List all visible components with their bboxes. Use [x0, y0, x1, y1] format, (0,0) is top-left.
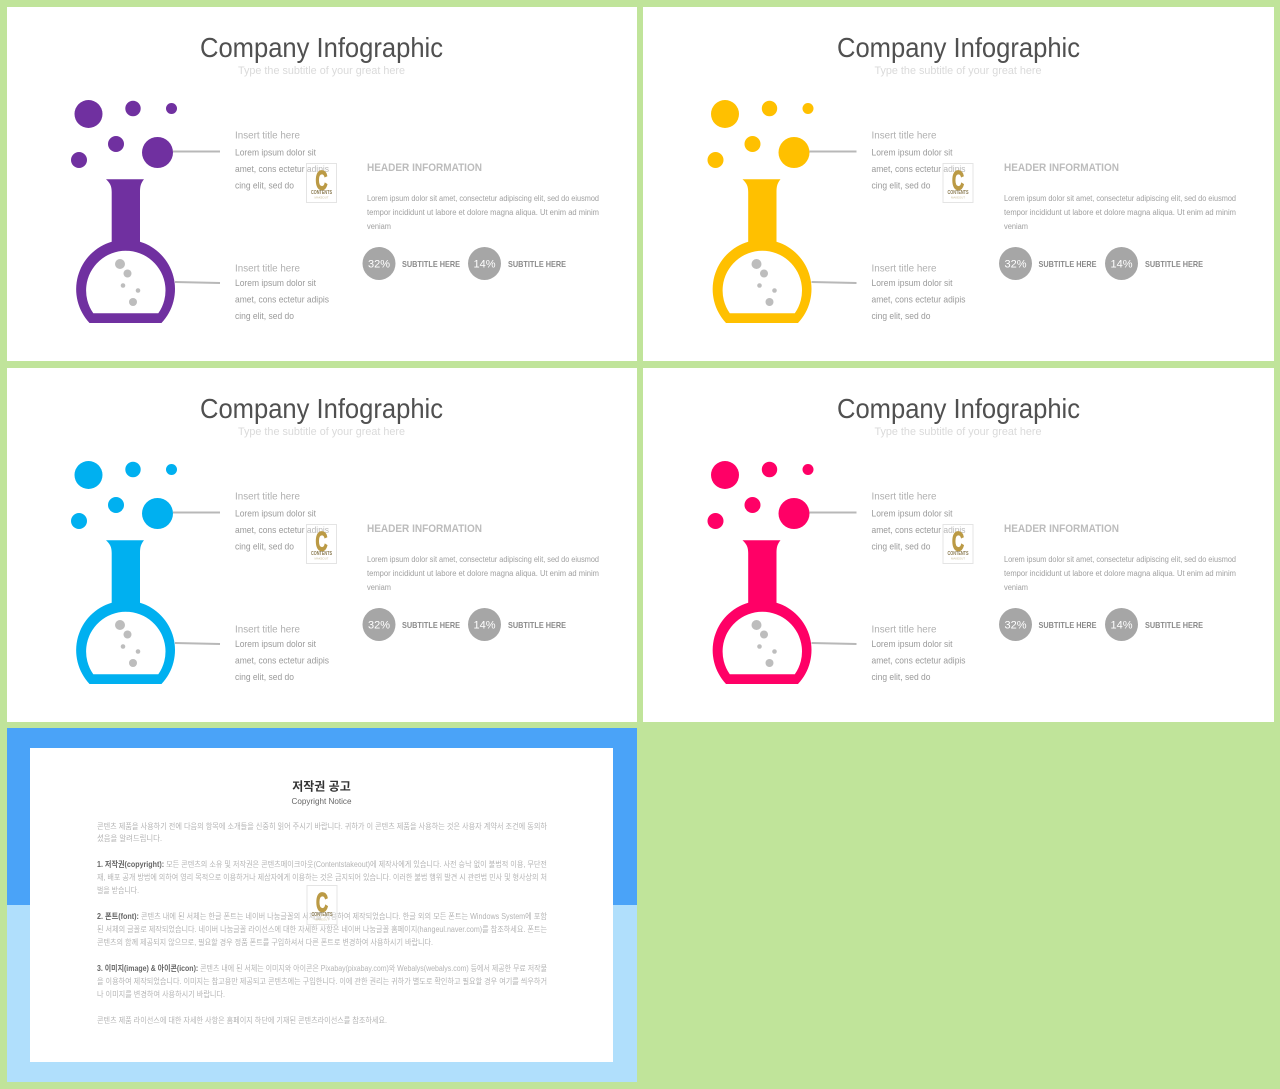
text block top: Insert title here: [872, 130, 937, 142]
logo badge: C: [316, 166, 328, 196]
text block top: [235, 492, 329, 552]
logo badge: CONTENTS: [311, 190, 333, 196]
stat 14%: [468, 608, 566, 641]
header information: HEADER INFORMATION: [1004, 162, 1119, 174]
text block bottom: Lorem ipsum dolor sit: [235, 639, 316, 650]
title: Company Infographic: [837, 32, 1080, 63]
text block top: cing elit, sed do: [235, 180, 294, 192]
light blue band bottom: [7, 905, 637, 1082]
text block top: cing elit, sed do: [872, 180, 930, 192]
logo badge: C: [316, 526, 328, 556]
icon: flask inner bubbles: [115, 259, 140, 306]
logo badge: [943, 164, 973, 202]
text block bottom: [872, 264, 966, 322]
stat 32%: 32%: [368, 620, 390, 632]
logo badge: C: [316, 888, 328, 918]
text block bottom: cing elit, sed do: [235, 672, 294, 683]
text block top: cing elit, sed do: [235, 542, 294, 552]
text block bottom: amet, cons ectetur adipis: [235, 656, 329, 666]
logo badge: [306, 164, 336, 202]
stat 14%: 14%: [473, 258, 496, 270]
paragraph: Lorem ipsum dolor sit amet, consectetur adipiscing elit, sed do eiusmod: [1004, 555, 1236, 564]
panel: copyright notice: [7, 728, 637, 1082]
title: Company Infographic: [837, 393, 1080, 424]
text block top: amet, cons ectetur adipis: [872, 525, 966, 536]
title: Company Infographic: [200, 393, 443, 424]
text block top: [872, 492, 966, 552]
icon: bubbles: [71, 461, 177, 529]
paragraph: veniam: [1004, 222, 1028, 231]
icon: flask: [713, 179, 811, 323]
stat 14%: [1105, 247, 1203, 280]
connector line bottom: [175, 643, 220, 644]
paragraph: [367, 555, 599, 592]
stat 32%: [999, 247, 1097, 280]
text block bottom: Insert title here: [872, 264, 937, 274]
logo badge: MAKEOUT: [314, 196, 329, 200]
stat 32%: SUBTITLE HERE: [1038, 620, 1097, 630]
connector line top: [810, 150, 856, 152]
text block bottom: Lorem ipsum dolor sit: [872, 278, 953, 289]
connector line top: [173, 512, 220, 514]
stat 14%: 14%: [473, 620, 496, 632]
paragraph: tempor incididunt ut labore et dolore magna aliqua. Ut enim ad minim: [367, 569, 599, 578]
section 2 font: 콘텐츠의 함께 제공되지 않으므로, 필요할 경우 정품 폰트를 구입하셔서 다른 폰트로 변경하여 사용하시기 바랍니다.: [97, 937, 433, 947]
text block top: amet, cons ectetur adipis: [235, 164, 329, 175]
text block top: Lorem ipsum dolor sit: [872, 148, 953, 158]
subtitle: Type the subtitle of your great here: [238, 65, 405, 77]
panel: purple flask slide: [7, 7, 637, 361]
text block bottom: cing elit, sed do: [872, 311, 930, 322]
panel: blue flask slide: [7, 368, 637, 722]
section 1 copyright: 벌을 받습니다.: [97, 885, 139, 895]
text block bottom: amet, cons ectetur adipis: [235, 294, 329, 306]
section 1 copyright: 1. 저작권(copyright): 모든 콘텐츠의 소유 및 저작권은 콘텐츠메이크아웃(Contentstakeout)에 제작사에게 있습니다. 사전 승낙 없이 불법적 이용, 무단전: [97, 859, 547, 869]
logo badge: CONTENTS: [948, 190, 969, 196]
section 3 image and icon: [97, 963, 547, 999]
slide background: [643, 368, 1274, 722]
connector line top: [810, 512, 856, 514]
logo badge: MAKEOUT: [315, 918, 329, 922]
paragraph: veniam: [1004, 583, 1028, 592]
paragraph: tempor incididunt ut labore et dolore magna aliqua. Ut enim ad minim: [1004, 208, 1236, 217]
section 1 copyright: 재, 배포 공개 방법에 의하여 영리 목적으로 이용하거나 제삼자에게 이용하는 것은 금지되어 있습니다. 이러한 불법 행위 발견 시 관련법 민사 및 형사상의 처: [97, 872, 547, 882]
logo badge: CONTENTS: [948, 551, 969, 557]
paragraph: Lorem ipsum dolor sit amet, consectetur adipiscing elit, sed do eiusmod: [367, 194, 599, 203]
logo badge: CONTENTS: [311, 551, 333, 557]
stat 32%: [362, 247, 460, 280]
logo badge: CONTENTS: [312, 912, 333, 918]
slide background: [7, 7, 637, 361]
logo badge: [307, 886, 337, 924]
section 2 font: 된 서체의 글꼴로 제작되었습니다. 네이버 나눔글꼴 라이선스에 대한 자세한 사항은 네이버 나눔글꼴 홈페이지(hangeul.naver.com)를 참조하세요. 폰트는: [97, 924, 547, 934]
icon: bubbles: [708, 100, 814, 168]
text block bottom: Lorem ipsum dolor sit: [872, 639, 953, 650]
stat 32%: SUBTITLE HERE: [1038, 259, 1097, 269]
icon: flask: [76, 540, 175, 684]
text block top: Lorem ipsum dolor sit: [872, 508, 953, 520]
stat 14%: SUBTITLE HERE: [508, 259, 566, 269]
paragraph: tempor incididunt ut labore et dolore magna aliqua. Ut enim ad minim: [367, 208, 599, 217]
icon: flask inner bubbles: [752, 620, 777, 667]
text block top: amet, cons ectetur adipis: [235, 525, 329, 536]
stat 14%: [468, 247, 566, 280]
paragraph: [1004, 555, 1236, 592]
panel: yellow flask slide: [643, 7, 1274, 361]
header information: HEADER INFORMATION: [1004, 523, 1119, 535]
stat 32%: [362, 608, 460, 641]
closing line: 콘텐츠 제품 라이선스에 대한 자세한 사항은 홈페이지 하단에 기재된 콘텐츠라이선스를 참조하세요.: [97, 1015, 387, 1025]
paragraph: veniam: [367, 583, 391, 592]
icon: flask inner bubbles: [115, 620, 140, 667]
text block top: Insert title here: [872, 492, 937, 502]
text block top: amet, cons ectetur adipis: [872, 164, 966, 175]
connector line bottom: [175, 282, 220, 283]
logo badge: C: [952, 526, 964, 556]
intro paragraph: 콘텐츠 제품을 사용하기 전에 다음의 항목에 소개들을 신중히 읽어 주시기 바랍니다. 귀하가 이 콘텐츠 제품을 사용하는 것은 사용자 계약서 조건에 동의하: [97, 821, 548, 831]
text block bottom: cing elit, sed do: [872, 672, 930, 683]
text block bottom: cing elit, sed do: [235, 311, 294, 322]
text block top: Insert title here: [235, 130, 300, 142]
paragraph: Lorem ipsum dolor sit amet, consectetur adipiscing elit, sed do eiusmod: [367, 555, 599, 564]
text block bottom: Insert title here: [235, 264, 300, 274]
stat 14%: 14%: [1110, 258, 1133, 270]
subtitle: Type the subtitle of your great here: [874, 426, 1042, 438]
header information: HEADER INFORMATION: [367, 162, 482, 174]
text block bottom: Insert title here: [235, 624, 300, 636]
logo badge: MAKEOUT: [951, 196, 965, 200]
subtitle: Type the subtitle of your great here: [238, 426, 405, 438]
notice subheading: Copyright Notice: [292, 796, 352, 806]
section 3 image and icon: 3. 이미지(image) & 아이콘(icon): 콘텐츠 내에 된 서체는 이미지와 아이콘은 Pixabay(pixabay.com)와 Webalys(webalys.com) 등에서 제공한 무료 저작물: [97, 963, 547, 973]
slide background: [7, 368, 637, 722]
stat 14%: [1105, 608, 1203, 641]
section 2 font: [97, 911, 548, 947]
white card: [30, 748, 613, 1062]
logo badge: [306, 524, 336, 564]
text block top: Insert title here: [235, 492, 300, 502]
section 3 image and icon: 을 이용하여 제작되었습니다. 이미지는 참고용만 제공되고 콘텐츠에는 구입한니다. 이에 관한 권리는 귀하가 별도로 확인하고 필요할 경우 여기를 씌우하거: [97, 976, 547, 986]
text block bottom: [235, 264, 329, 322]
text block bottom: [235, 624, 329, 683]
notice heading: 저작권 공고: [292, 778, 351, 794]
paragraph: tempor incididunt ut labore et dolore magna aliqua. Ut enim ad minim: [1004, 569, 1236, 578]
text block top: cing elit, sed do: [872, 542, 930, 552]
paragraph: veniam: [367, 222, 391, 231]
blue band top: [7, 728, 637, 905]
text block top: [235, 130, 329, 192]
logo badge: [943, 524, 973, 564]
stat 14%: SUBTITLE HERE: [1145, 259, 1203, 269]
section 3 image and icon: 나 이미지를 변경하여 사용하시기 바랍니다.: [97, 989, 225, 999]
connector line bottom: [812, 643, 856, 644]
stat 32%: 32%: [1004, 258, 1027, 270]
stat 32%: [999, 608, 1097, 641]
text block bottom: Lorem ipsum dolor sit: [235, 278, 316, 289]
icon: bubbles: [708, 461, 814, 529]
connector line top: [173, 150, 220, 152]
header information: HEADER INFORMATION: [367, 523, 482, 535]
section 2 font: 2. 폰트(font): 콘텐츠 내에 된 서체는 한글 폰트는 네이버 나눔글꼴의 서체를 사용하여 제작되었습니다. 한글 외의 모든 폰트는 Windows System에 포함: [97, 911, 548, 921]
text block bottom: Insert title here: [872, 624, 937, 636]
text block bottom: [872, 624, 966, 683]
intro paragraph: 셨음을 알려드립니다.: [97, 833, 162, 843]
stat 32%: 32%: [368, 258, 390, 270]
title: Company Infographic: [200, 32, 443, 63]
icon: flask inner bubbles: [752, 259, 777, 306]
icon: bubbles: [71, 100, 177, 168]
stat 32%: SUBTITLE HERE: [402, 620, 460, 630]
text block top: Lorem ipsum dolor sit: [235, 148, 316, 158]
stat 14%: 14%: [1110, 620, 1133, 632]
panel: pink flask slide: [643, 368, 1274, 722]
intro paragraph: [97, 821, 548, 843]
connector line bottom: [812, 282, 856, 283]
stat 14%: SUBTITLE HERE: [1145, 620, 1203, 630]
text block top: Lorem ipsum dolor sit: [235, 508, 316, 520]
text block top: [872, 130, 966, 192]
stat 32%: SUBTITLE HERE: [402, 259, 460, 269]
logo badge: MAKEOUT: [314, 556, 329, 560]
paragraph: [367, 194, 599, 231]
logo badge: MAKEOUT: [951, 556, 965, 560]
text block bottom: amet, cons ectetur adipis: [872, 656, 966, 666]
logo badge: C: [952, 166, 964, 196]
section 1 copyright: [97, 859, 547, 895]
paragraph: [1004, 194, 1236, 231]
text block bottom: amet, cons ectetur adipis: [872, 294, 966, 306]
stat 32%: 32%: [1004, 620, 1027, 632]
slide background: [643, 7, 1274, 361]
icon: flask: [76, 179, 175, 323]
stat 14%: SUBTITLE HERE: [508, 620, 566, 630]
subtitle: Type the subtitle of your great here: [874, 65, 1042, 77]
paragraph: Lorem ipsum dolor sit amet, consectetur adipiscing elit, sed do eiusmod: [1004, 194, 1236, 203]
icon: flask: [713, 540, 811, 684]
